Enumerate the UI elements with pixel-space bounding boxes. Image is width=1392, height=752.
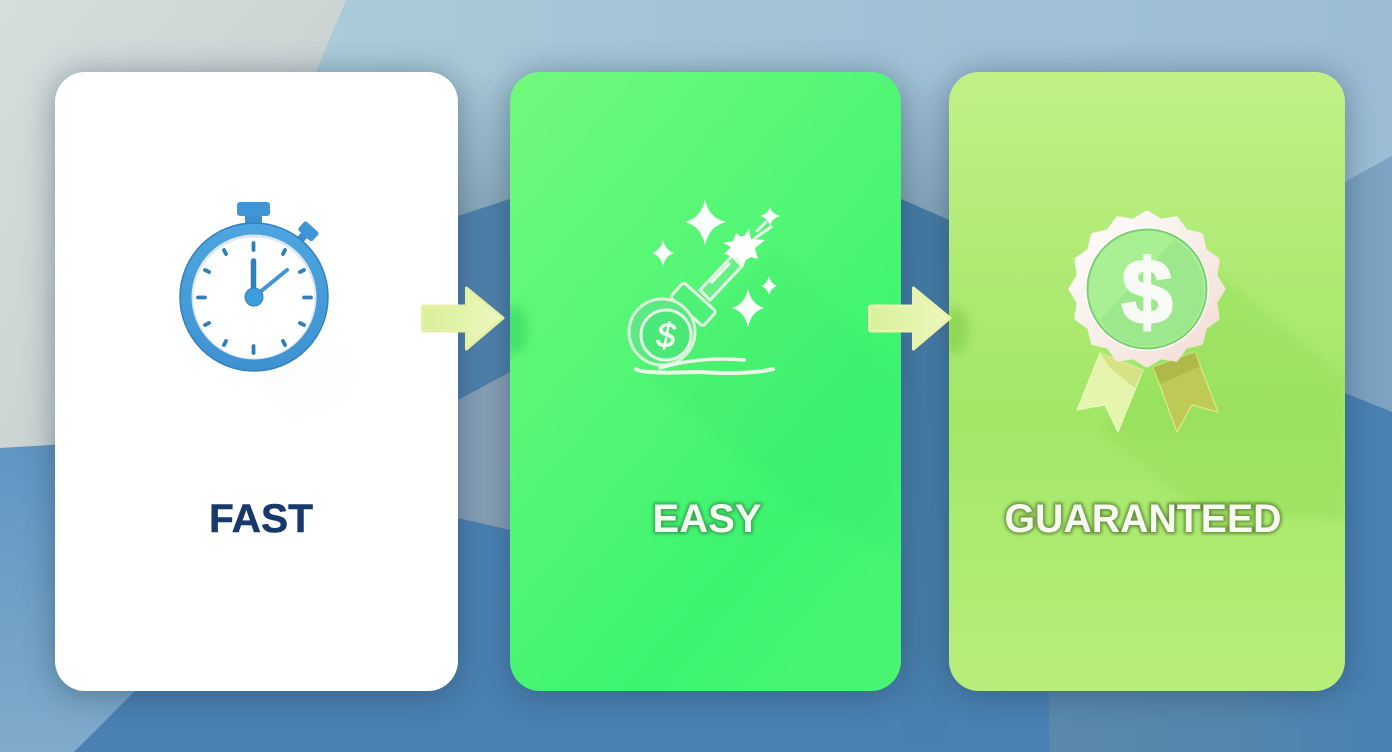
seal: [1071, 213, 1223, 365]
label: easy: EASY: [652, 497, 762, 541]
label: fast: FAST: [209, 497, 313, 541]
icon: medal: [1071, 213, 1223, 432]
icon: magic wand and coin: [629, 201, 779, 373]
label: guaranteed: GUARANTEED: [1004, 497, 1282, 541]
sparkles: [653, 201, 779, 326]
coin: [629, 299, 695, 365]
panel: easy: [500, 72, 901, 691]
icon: medal: $: [1122, 242, 1172, 343]
wand stick: [700, 256, 742, 300]
ribbon left: [1077, 353, 1143, 432]
panel: guaranteed: [941, 72, 1345, 691]
panel: fast: [55, 72, 458, 691]
swoosh: [636, 369, 773, 373]
label: easy: EASY: [652, 497, 762, 541]
ribbon right: [1153, 352, 1218, 432]
arrow: easy to guaranteed: [870, 288, 950, 349]
label: guaranteed: GUARANTEED: [1004, 497, 1282, 541]
wand band: [670, 282, 716, 326]
arrow: fast to easy: [422, 288, 503, 349]
icon: stopwatch: [180, 202, 328, 371]
card shadows: [55, 74, 1345, 695]
wand star: [723, 229, 765, 266]
icon: magic wand and coin: $: [656, 317, 677, 355]
